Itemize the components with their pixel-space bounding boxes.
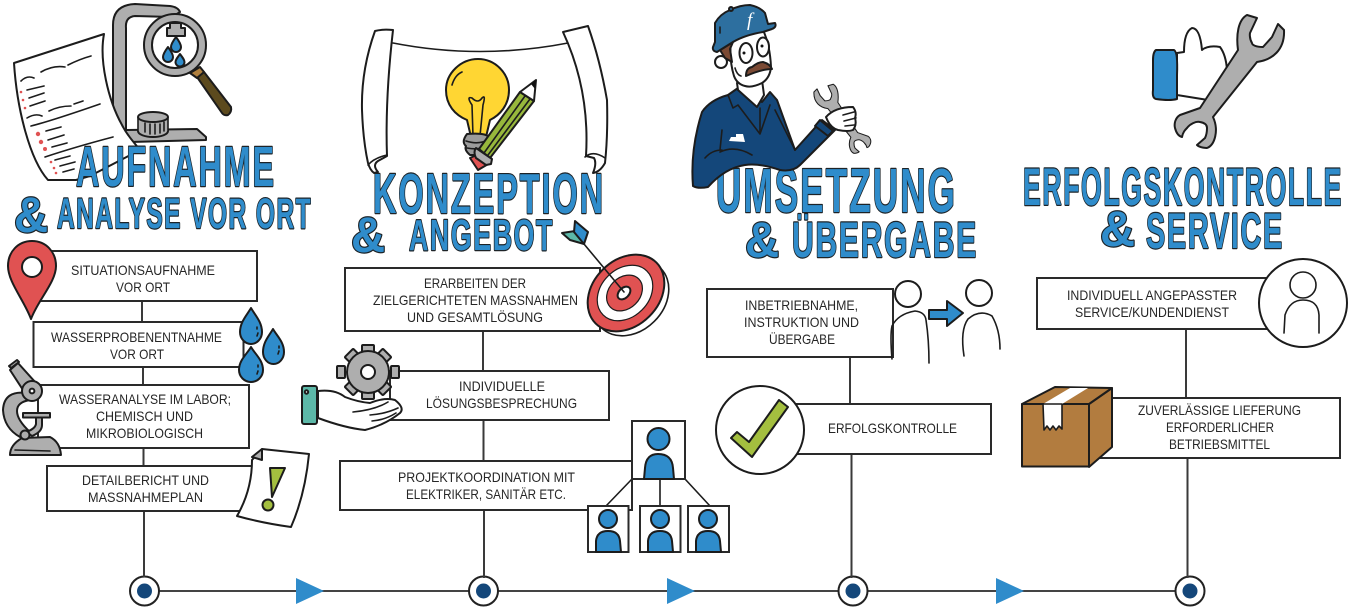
box: Individuelle Lösungsbesprechung: LÖSUNGSBESPRECHUNG [426,394,577,411]
heading: Umsetzung & Übergabe: ÜBERGABE [792,212,978,268]
heading: Konzeption & Angebot: ANGEBOT [409,211,554,260]
icon: hand holding gear [302,345,402,430]
icon: target with arrow [562,221,684,351]
illustration: scroll with bulb and pencil [362,26,607,173]
box: Wasseranalyse [38,385,249,448]
icon: check mark in circle [716,386,804,474]
icon: map pin [8,241,56,319]
box: Inbetriebnahme: INBETRIEBNAHME, [745,297,858,313]
box: Lieferung Betriebsmittel [1100,398,1340,458]
icon: two people with hand-over arrow [891,280,1000,363]
connector lines [142,301,144,577]
box: Lieferung Betriebsmittel: ERFORDERLICHER [1166,419,1274,435]
heading: Erfolgskontrolle & Service [1023,158,1343,259]
icon: person in circle [1259,259,1347,347]
box: Detailbericht: MASSNAHMEPLAN [88,489,203,505]
illustration: report and magnifier over tap [14,4,231,180]
heading: Aufnahme & Analyse vor Ort: ANALYSE VOR ORT [57,190,312,238]
heading: Umsetzung & Übergabe: UMSETZUNG [716,157,957,226]
box: Detailbericht: DETAILBERICHT UND [82,472,209,488]
heading: Erfolgskontrolle & Service: & [1100,201,1138,257]
box: Situationsaufnahme [40,251,257,301]
heading: Umsetzung & Übergabe [716,157,978,268]
illustration: technician with wrench [692,5,871,188]
connector lines [483,331,484,578]
box: Projektkoordination: ELEKTRIKER, SANITÄR ETC. [406,486,566,502]
box: Wasseranalyse: MIKROBIOLOGISCH [86,425,203,441]
box: Inbetriebnahme [707,289,893,357]
box: Wasserprobenentnahme [34,322,244,367]
box: Erfolgskontrolle: ERFOLGSKONTROLLE [828,420,957,436]
box: Situationsaufnahme: SITUATIONSAUFNAHME [71,262,215,278]
heading: Konzeption & Angebot [351,162,605,263]
icon: delivery box [1022,387,1112,467]
icon: team organisation chart [588,421,729,552]
box: Service/Kundendienst: SERVICE/KUNDENDIENST [1075,304,1229,320]
panel: Erfolgskontrolle und Service [1022,15,1347,578]
box: Erarbeiten [345,268,600,331]
box: Individuelle Lösungsbesprechung: INDIVIDUELLE [459,378,545,394]
box: Lieferung Betriebsmittel: ZUVERLÄSSIGE LIEFERUNG [1138,402,1301,418]
heading: Aufnahme & Analyse vor Ort: & [14,187,51,243]
box: Situationsaufnahme: VOR ORT [116,279,170,295]
icon: microscope [3,360,61,455]
icon: water drops [239,308,284,382]
box: Erarbeiten: UND GESAMTLÖSUNG [407,308,543,325]
box: Erfolgskontrolle [790,404,991,454]
panel: Aufnahme und Analyse [3,4,312,577]
box: Inbetriebnahme: ÜBERGABE [769,330,835,347]
heading: Konzeption & Angebot: & [351,207,388,263]
box: Erarbeiten: ERARBEITEN DER [424,275,526,291]
box: Lieferung Betriebsmittel: BETRIEBSMITTEL [1169,436,1270,452]
box: Wasserprobenentnahme: WASSERPROBENENTNAHME [51,329,222,345]
panel: Umsetzung und Übergabe [692,5,1000,578]
illustration: technician with wrench: f [747,10,755,31]
box: Individuelle Lösungsbesprechung [390,371,609,420]
heading: Aufnahme & Analyse vor Ort [14,135,312,243]
box: Wasseranalyse: WASSERANALYSE IM LABOR; [59,391,231,407]
box: Erarbeiten: ZIELGERICHTETEN MASSNAHMEN [373,292,578,308]
heading: Konzeption & Angebot: KONZEPTION [373,162,605,226]
timeline [130,576,1204,606]
box: Inbetriebnahme: INSTRUKTION UND [744,314,859,330]
connector lines [850,357,852,578]
box: Projektkoordination: PROJEKTKOORDINATION MIT [398,469,575,485]
illustration: thumbs up and wrench [1153,15,1284,148]
icon: note with exclamation mark [237,449,309,527]
box: Wasserprobenentnahme: VOR ORT [110,346,164,362]
heading: Aufnahme & Analyse vor Ort: AUFNAHME [76,135,276,199]
box: Service/Kundendienst [1037,278,1272,329]
heading: Umsetzung & Übergabe: & [745,212,782,268]
box: Projektkoordination [340,461,632,510]
connector lines [1186,329,1188,578]
box: Service/Kundendienst: INDIVIDUELL ANGEPASSTER [1067,287,1237,303]
box: Detailbericht [47,466,252,511]
panel: Konzeption und Angebot [302,26,729,578]
box: Wasseranalyse: CHEMISCH UND [96,408,193,424]
